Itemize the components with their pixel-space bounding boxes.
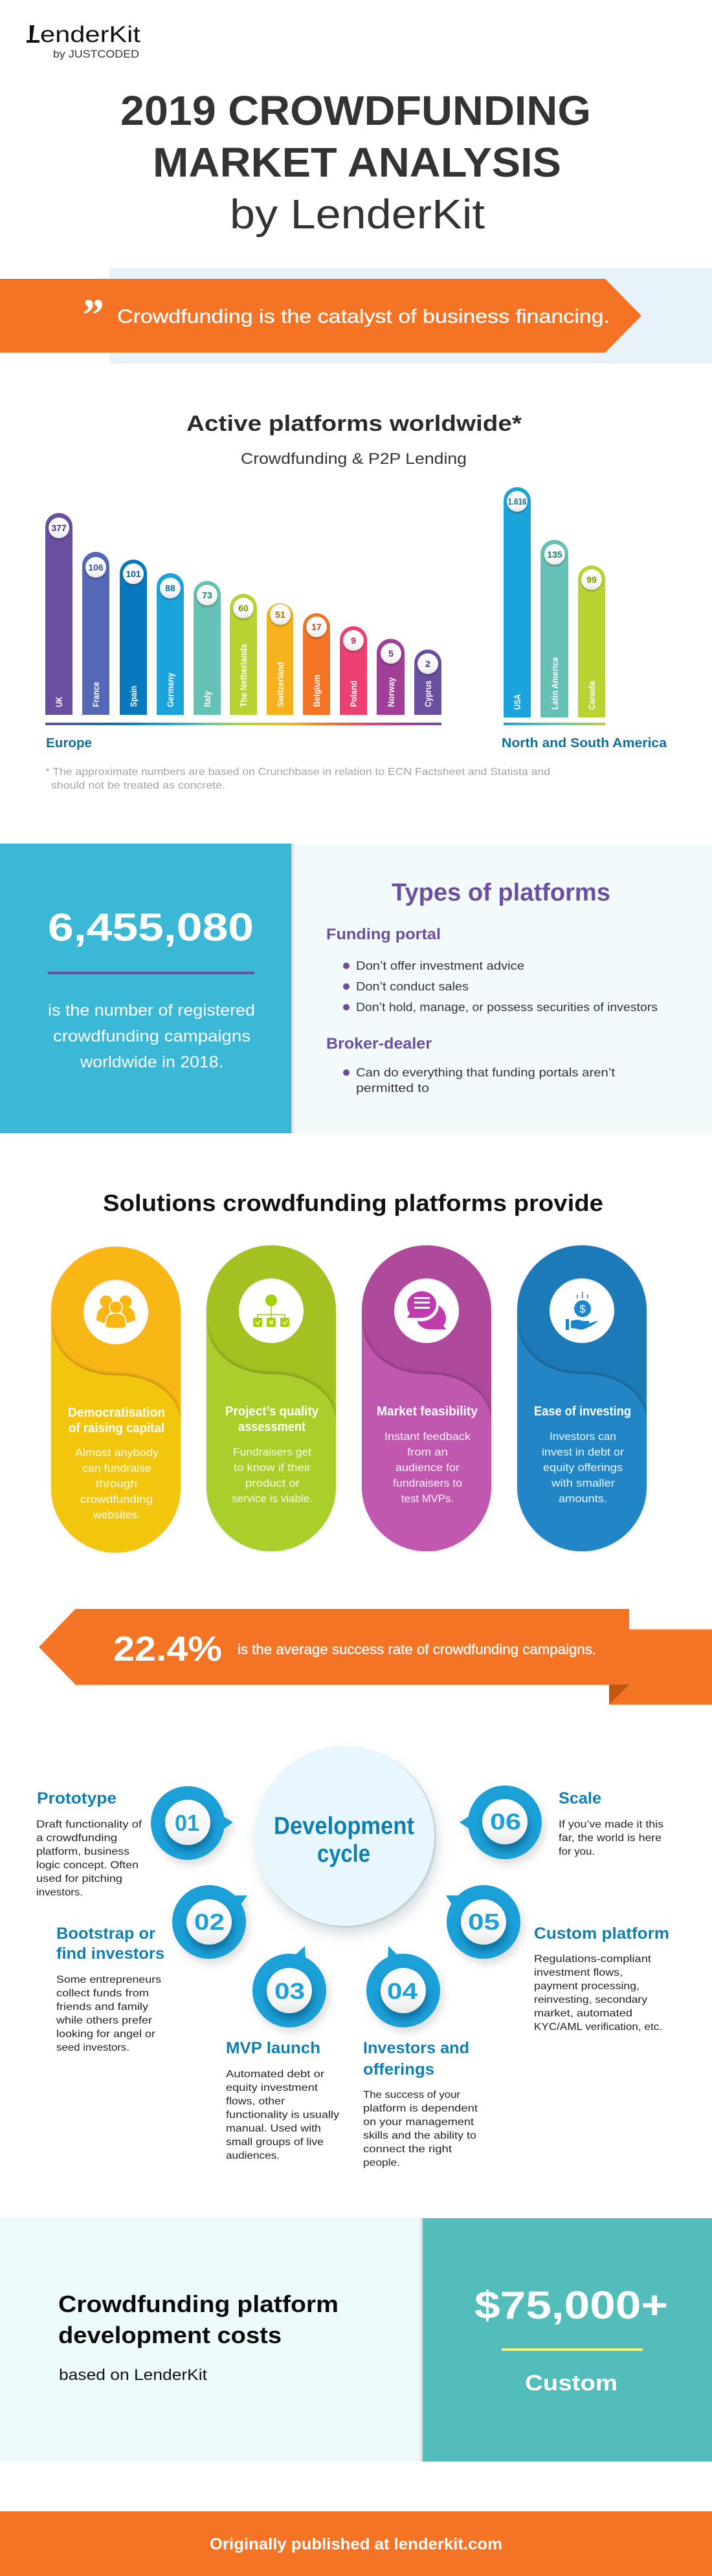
panel: development costs <box>0 2218 423 2461</box>
step 01: prototype: used for pitching <box>36 1873 122 1884</box>
logo: LenderKit by JUSTCODED: enderKit <box>40 22 140 47</box>
step 03: MVP launch: MVP launch <box>226 2039 320 2057</box>
card: project's quality assessment <box>206 1245 336 1556</box>
step 06: scale: far, the world is here <box>559 1833 662 1844</box>
stat description: is the number of registered <box>48 1001 255 1020</box>
badge 06: 06 <box>490 1809 521 1835</box>
card text <box>68 1406 165 1521</box>
step 01: prototype: Prototype <box>37 1789 117 1807</box>
panel: registered campaigns stat <box>0 844 291 1133</box>
stat description: crowdfunding campaigns <box>53 1027 250 1045</box>
step 04: investors and offerings: Investors and <box>363 2039 469 2057</box>
step 01: prototype <box>36 1786 233 1898</box>
step 05: custom platform: Custom platform <box>534 1925 669 1943</box>
footnote: should not be treated as concrete. <box>51 780 225 791</box>
percentage: 22.4% <box>113 1630 222 1668</box>
step 01: prototype: logic concept. Often <box>36 1860 139 1871</box>
heading: solutions: Solutions crowdfunding platforms provide <box>103 1190 603 1216</box>
footer: Originally published at lenderkit.com <box>210 2535 502 2553</box>
panel: cost figure: $75,000+ <box>474 2284 668 2327</box>
badge 01 <box>151 1786 233 1860</box>
bar chart: Europe: The Netherlands <box>238 644 249 707</box>
bar chart: Europe <box>45 513 441 715</box>
card text: audience for <box>395 1461 460 1474</box>
bar chart: Europe: 60 <box>238 603 249 613</box>
step 03: MVP launch: small groups of live <box>226 2137 324 2148</box>
step 05: custom platform: reinvesting, secondary <box>534 1994 647 2005</box>
stat description <box>48 1001 255 1071</box>
card text <box>377 1404 478 1505</box>
bar chart: North and South America: Canada <box>586 681 597 710</box>
badge 05: 05 <box>468 1910 500 1935</box>
step 04: investors and offerings: on your management <box>363 2117 474 2128</box>
funding portal: Funding portal <box>326 926 441 943</box>
badge 04: 04 <box>387 1979 418 2004</box>
card text: websites. <box>93 1509 140 1521</box>
big number: 6,455,080 <box>48 906 254 949</box>
broker-dealer: permitted to <box>356 1082 429 1095</box>
card text: with smaller <box>551 1477 615 1489</box>
bar chart: North and South America: Latin America <box>550 657 560 710</box>
footnote: * The approximate numbers are based on Crunchbase in relation to ECN Factsheet and Statista and <box>45 767 550 778</box>
card text: Democratisation <box>68 1406 165 1420</box>
icon: coin over hand: $ <box>579 1303 586 1315</box>
center circle: development cycle: Development <box>274 1813 414 1840</box>
icon: coin over hand <box>566 1292 597 1330</box>
step 03: MVP launch: Automated debt or <box>226 2069 325 2080</box>
bar chart: Europe: 51 <box>275 609 285 620</box>
funding portal: Don’t conduct sales <box>356 980 469 993</box>
step 03: MVP launch: equity investment <box>226 2082 318 2093</box>
funding portal: Don’t hold, manage, or possess securities of investors <box>356 1001 658 1014</box>
card text: fundraisers to <box>393 1477 462 1489</box>
card text <box>225 1404 319 1505</box>
bar chart: North and South America: USA <box>512 694 522 710</box>
bar chart: Europe: 5 <box>388 648 394 659</box>
step 02: bootstrap <box>56 1885 247 2053</box>
step 03: MVP launch: manual. Used with <box>226 2123 321 2134</box>
badge 03 <box>252 1946 326 2027</box>
card text: Instant feedback <box>384 1430 471 1443</box>
panel: development costs: development costs <box>58 2322 282 2348</box>
bar chart: Europe: Italy <box>202 691 212 707</box>
panel: types of platforms <box>291 844 712 1133</box>
card: market feasibility <box>362 1245 491 1556</box>
bar chart: North and South America: 99 <box>586 574 597 585</box>
step 02: bootstrap: collect funds from <box>56 1988 149 1999</box>
icon: hierarchy checklist <box>253 1294 289 1327</box>
card text: Project’s quality <box>225 1404 319 1419</box>
title <box>120 87 591 237</box>
center circle: development cycle <box>254 1746 436 1928</box>
quote banner <box>0 268 712 364</box>
step 02: bootstrap: Bootstrap or <box>56 1925 155 1943</box>
bar chart: Europe: 101 <box>126 569 141 579</box>
bar chart: Europe: Spain <box>128 686 139 707</box>
bar chart: Europe: Germany <box>165 673 175 707</box>
ribbon: success rate <box>39 1609 712 1705</box>
step 05: custom platform: payment processing, <box>534 1981 640 1992</box>
funding portal <box>326 926 658 1014</box>
step 02: bootstrap: looking for angel or <box>56 2029 156 2040</box>
card text: test MVPs. <box>401 1492 454 1505</box>
legend: Europe <box>45 723 441 750</box>
subheading: Crowdfunding & P2P Lending <box>241 450 467 468</box>
badge 02 <box>172 1885 247 1959</box>
step 02: bootstrap: find investors <box>56 1945 164 1963</box>
bar chart: Europe: Belgium <box>311 675 322 707</box>
bar chart: Europe: 2 <box>425 659 430 669</box>
step 04: investors and offerings: The success of your <box>363 2090 461 2101</box>
card text: can fundraise <box>82 1462 151 1474</box>
card: ease of investing <box>517 1245 647 1556</box>
bar chart: North and South America: 1.616 <box>507 496 527 507</box>
card text <box>534 1404 631 1505</box>
title: by LenderKit <box>230 191 485 237</box>
badge 01: 01 <box>175 1811 199 1836</box>
card text: service is viable. <box>232 1492 313 1505</box>
card text: through <box>96 1478 137 1490</box>
panel: cost figure <box>423 2218 712 2461</box>
bar chart: Europe: 17 <box>311 622 322 632</box>
card text: of raising capital <box>69 1421 164 1435</box>
step 05: custom platform: KYC/AML verification, etc. <box>534 2022 662 2033</box>
broker-dealer: Broker-dealer <box>326 1035 432 1053</box>
step 04: investors and offerings: offerings <box>363 2060 434 2079</box>
badge 02: 02 <box>194 1910 225 1935</box>
step 02: bootstrap: Some entrepreneurs <box>56 1974 161 1985</box>
badge 03: 03 <box>274 1979 305 2004</box>
broker-dealer: Can do everything that funding portals aren’t <box>356 1066 615 1079</box>
bar chart: Europe: Cyprus <box>423 681 433 707</box>
card text: from an <box>407 1446 448 1458</box>
step 01: prototype: a crowdfunding <box>36 1833 117 1844</box>
bar chart: Europe: 73 <box>202 590 212 600</box>
step 04: investors and offerings: skills and the ability to <box>363 2130 476 2141</box>
step 02: bootstrap: seed investors. <box>56 2042 129 2053</box>
panel: cost figure: Custom <box>525 2371 617 2396</box>
step 03: MVP launch: audiences. <box>226 2150 280 2161</box>
broker-dealer <box>326 1035 615 1095</box>
bar chart: Europe: 377 <box>51 523 67 533</box>
bar chart: Europe: UK <box>54 697 64 707</box>
title: 2019 CROWDFUNDING <box>120 87 591 134</box>
bar chart: Europe: Norway <box>386 677 396 707</box>
footer <box>0 2511 712 2576</box>
bar chart: Europe: Poland <box>348 681 359 707</box>
center circle: development cycle: cycle <box>317 1840 370 1868</box>
bar chart: Europe: 106 <box>88 562 104 573</box>
title: MARKET ANALYSIS <box>153 139 561 186</box>
card text: crowdfunding <box>80 1493 153 1505</box>
badge 04 <box>366 1946 440 2027</box>
step 05: custom platform: Regulations-compliant <box>534 1954 652 1965</box>
badge 05 <box>446 1885 520 1959</box>
step 03: MVP launch <box>226 1946 339 2161</box>
bar chart: Europe: 88 <box>165 583 175 593</box>
card: democratisation <box>51 1247 181 1557</box>
icon: chat bubbles <box>407 1291 446 1329</box>
heading: Types of platforms <box>392 879 610 906</box>
panel: development costs: based on LenderKit <box>59 2366 207 2384</box>
heading: active platforms: Active platforms worldwide* <box>186 411 522 436</box>
bar chart: North and South America: 135 <box>547 549 562 560</box>
step 04: investors and offerings: platform is dependent <box>363 2103 478 2114</box>
step 04: investors and offerings: connect the right <box>363 2144 452 2155</box>
card text: Fundraisers get <box>233 1446 311 1458</box>
stat description: worldwide in 2018. <box>80 1053 223 1071</box>
card text: Market feasibility <box>377 1404 478 1419</box>
legend: North and South America: North and South America <box>502 736 667 750</box>
step 06: scale <box>460 1785 663 1859</box>
logo: LenderKit by JUSTCODED <box>27 22 140 60</box>
card text: invest in debt or <box>542 1446 624 1458</box>
step 05: custom platform: investment flows, <box>534 1967 623 1978</box>
legend: Europe: Europe <box>46 736 92 750</box>
step 01: prototype: platform, business <box>36 1846 129 1857</box>
badge 06 <box>460 1785 542 1859</box>
card text: amounts. <box>559 1492 607 1505</box>
bar chart: Europe: 9 <box>351 635 356 646</box>
card text: to know if their <box>234 1461 311 1474</box>
step 04: investors and offerings: people. <box>363 2157 400 2168</box>
icon: people <box>96 1295 135 1329</box>
step 02: bootstrap: while others prefer <box>56 2015 153 2026</box>
step 06: scale: If you’ve made it this <box>559 1819 663 1830</box>
step 01: prototype: Draft functionality of <box>36 1819 142 1830</box>
card text: Investors can <box>550 1430 616 1443</box>
funding portal: Don’t offer investment advice <box>356 959 524 972</box>
card text: assessment <box>238 1420 306 1434</box>
step 05: custom platform <box>446 1885 669 2033</box>
ribbon text: is the average success rate of crowdfunding campaigns. <box>238 1641 596 1657</box>
bar chart: Europe: Switzerland <box>275 662 285 707</box>
step 04: investors and offerings <box>363 1946 478 2168</box>
bar chart: North and South America <box>504 487 605 717</box>
step 06: scale: for you. <box>559 1846 595 1857</box>
quote text: Crowdfunding is the catalyst of business financing. <box>117 306 610 327</box>
logo: LenderKit by JUSTCODED: by JUSTCODED <box>53 48 139 60</box>
step 02: bootstrap: friends and family <box>56 2002 148 2013</box>
step 03: MVP launch: flows, other <box>226 2096 285 2107</box>
card text: product or <box>245 1477 300 1489</box>
legend: North and South America <box>502 723 667 750</box>
step 06: scale: Scale <box>559 1789 601 1807</box>
card text: Almost anybody <box>75 1446 159 1459</box>
footnote <box>45 767 550 791</box>
card text: equity offerings <box>543 1461 623 1474</box>
bar chart: Europe: France <box>91 682 101 707</box>
step 05: custom platform: market, automated <box>534 2008 632 2019</box>
step 03: MVP launch: functionality is usually <box>226 2110 339 2121</box>
step 01: prototype: investors. <box>36 1887 83 1898</box>
panel: development costs: Crowdfunding platform <box>58 2291 339 2317</box>
icon: quotation mark: ” <box>80 290 103 340</box>
card text: Ease of investing <box>534 1404 631 1419</box>
